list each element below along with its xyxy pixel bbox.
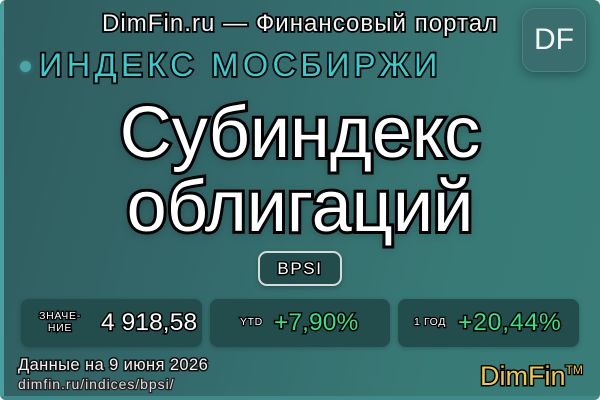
main title: Субиндекс (120, 93, 480, 173)
stat label: value (38, 309, 81, 334)
stat: 1 year (398, 299, 579, 347)
source url: dimfin.ru/indices/bpsi/ (18, 376, 174, 392)
main title (120, 93, 482, 248)
brand mark: DimFinTM (480, 361, 583, 391)
ticker badge (258, 251, 342, 286)
stat label: 1 year: 1 ГОД (414, 316, 446, 328)
status dot (20, 61, 31, 72)
header title: DimFin.ru — Финансовый портал (102, 10, 498, 37)
stat: YTD (210, 299, 390, 347)
bottom edge (0, 396, 600, 400)
logo badge: DF (534, 23, 574, 56)
stat label: value: ЗНАЧЕ- (39, 310, 81, 322)
stat number: value: 4 918,58 (101, 309, 197, 336)
stat label: YTD: YTD (240, 316, 263, 328)
category label: ИНДЕКС МОСБИРЖИ (39, 47, 442, 83)
left accent bar (0, 0, 4, 400)
main title: облигаций (127, 167, 473, 247)
stat number: YTD: +7,90% (274, 309, 358, 336)
stat number: 1 year: +20,44% (458, 309, 562, 336)
logo badge (522, 8, 586, 72)
data date: Данные на 9 июня 2026 (18, 356, 208, 374)
ticker text: BPSI (277, 259, 323, 278)
stat label: value: НИЕ (48, 322, 72, 334)
stat: value (21, 299, 202, 347)
